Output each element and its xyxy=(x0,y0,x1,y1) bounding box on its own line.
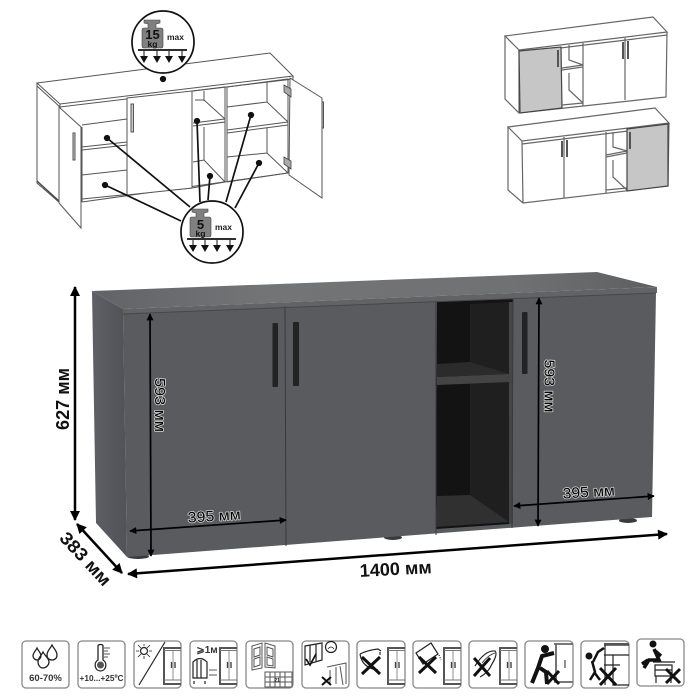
dimension: left door width 395 mm xyxy=(130,506,286,531)
door seams xyxy=(285,299,513,546)
line drawing: open cabinet with load limits xyxy=(37,11,324,263)
load badge: 15 kg max: kg xyxy=(148,39,157,49)
icon: do not sit on furniture xyxy=(637,639,684,686)
icon: avoid direct sunlight xyxy=(134,641,181,688)
load badge: 5 kg max: kg xyxy=(196,228,205,238)
dimension: left door width 395 mm: 395 мм xyxy=(187,506,241,527)
front body xyxy=(123,292,656,557)
icon: keep 1 m from heaters xyxy=(190,641,237,688)
dimension: depth 383 mm: 383 мм xyxy=(56,528,115,590)
icon: no wet cleaning xyxy=(357,641,405,688)
icon: no spilled liquids xyxy=(413,641,461,688)
icon: keep 1 m from heaters: ⩾1м xyxy=(196,645,218,656)
care icons row xyxy=(22,639,684,688)
legs xyxy=(127,518,637,559)
dimension: right door width 395 mm xyxy=(514,482,654,506)
load badge: 5 kg max: max xyxy=(215,222,232,232)
door handles xyxy=(272,312,528,387)
icon: correct and incorrect door adjustment xyxy=(302,641,349,688)
leader lines to shelves xyxy=(103,77,261,221)
load badge: 5 kg max: 5 xyxy=(197,217,204,232)
dimension: width 1400 mm: 1400 мм xyxy=(359,557,432,581)
top surface xyxy=(92,272,657,309)
dimension: right door width 395 mm: 395 мм xyxy=(562,482,615,503)
icon: humidity 60-70% xyxy=(22,641,69,688)
load badge: 15 kg max: max xyxy=(167,32,184,42)
icon: temperature +10...+25°C: +10...+25ºC xyxy=(80,673,124,683)
icon: do not climb furniture xyxy=(581,641,629,688)
dark cabinet photo xyxy=(92,272,657,559)
variant: gray door on the right xyxy=(508,108,669,203)
icon: ventilate room, 21 days xyxy=(246,641,293,688)
icon: ventilate room, 21 days: 21 xyxy=(274,678,280,684)
dimension: width 1400 mm xyxy=(128,534,667,581)
variant: gray door on the left xyxy=(505,17,667,113)
icon: temperature +10...+25°C xyxy=(78,641,125,688)
icon: humidity 60-70%: 60-70% xyxy=(29,673,62,684)
load badge: 15 kg max: 15 xyxy=(145,27,160,42)
icon: do not push furniture xyxy=(525,641,573,688)
open niche xyxy=(436,299,513,529)
load badge: 15 kg max xyxy=(132,11,194,73)
dimension: right door height 593 mm: 593 мм xyxy=(540,360,558,412)
side panel xyxy=(92,291,127,557)
dimension: height 627 mm: 627 мм xyxy=(53,368,73,430)
load badge: 5 kg max xyxy=(181,201,243,263)
icon: no abrasive wiping xyxy=(469,641,517,688)
cabinet outline xyxy=(37,53,324,228)
dimension: left door height 593 mm: 593 мм xyxy=(151,378,168,432)
